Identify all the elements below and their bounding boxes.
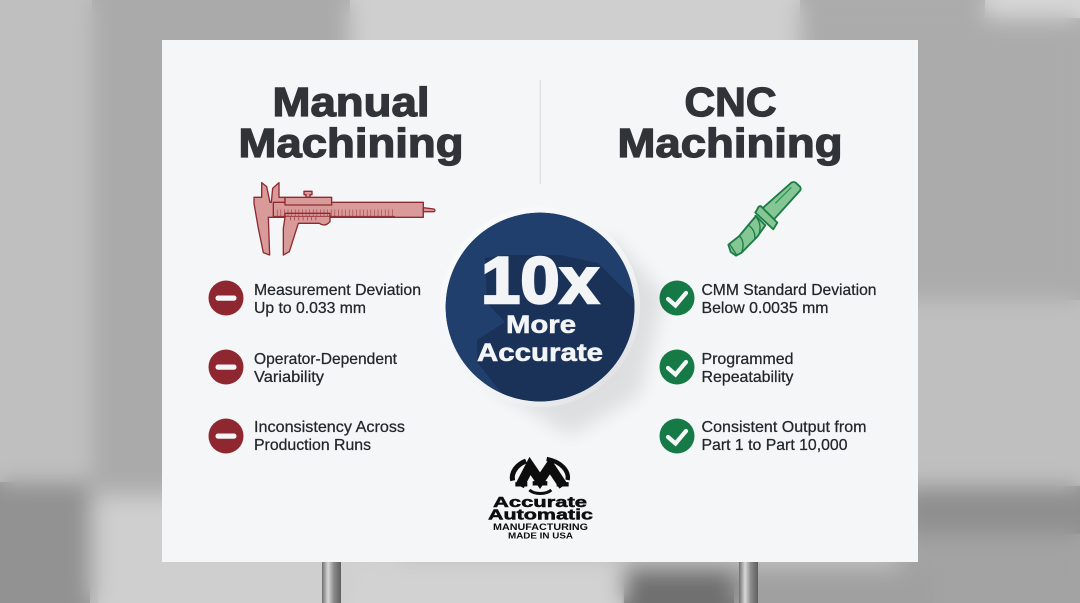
icon: check (660, 350, 694, 384)
text: operator variability: Variability (254, 369, 324, 386)
logo mark (512, 459, 569, 493)
badge: 10x more accurate (440, 207, 664, 436)
text: measurement deviation (254, 282, 421, 317)
signpost: left (322, 560, 341, 603)
centre divider (540, 80, 541, 184)
badge disc (446, 212, 640, 410)
logo wordmark: Accurate (493, 494, 587, 511)
icon: vernier caliper (254, 183, 435, 255)
text: consistent output (702, 419, 866, 454)
icon: check (660, 418, 694, 454)
logo wordmark: MADE IN USA (508, 530, 573, 540)
icon: green drill bit (728, 182, 801, 256)
heading: Manual Machining (238, 79, 464, 166)
heading: CNC Machining: Machining (618, 120, 842, 166)
logo wordmark: Automatic (488, 506, 593, 524)
heading: Manual Machining: Machining (238, 120, 464, 166)
text: inconsistency: Production Runs (254, 437, 371, 454)
list: manual machining drawbacks (208, 280, 421, 454)
heading: CNC Machining: CNC (684, 79, 776, 125)
signpost: right (739, 560, 758, 603)
logo wordmark: MANUFACTURING (493, 522, 588, 533)
icon: minus (208, 350, 244, 384)
badge label: Accurate (477, 339, 603, 367)
text: measurement deviation: Measurement Deviation (254, 282, 421, 299)
text: consistent output: Consistent Output from (702, 419, 866, 436)
text: operator variability (254, 351, 398, 386)
text: CMM standard deviation (702, 282, 876, 317)
badge label (477, 311, 603, 367)
heading: CNC Machining (618, 79, 842, 166)
sign panel (162, 40, 918, 562)
logo wordmark (488, 494, 593, 540)
text: inconsistency: Inconsistency Across (254, 419, 405, 436)
badge label: More (506, 311, 576, 339)
badge number: 10x (481, 243, 599, 317)
heading: Manual Machining: Manual (272, 79, 430, 125)
text: CMM standard deviation: Below 0.0035 mm (702, 300, 828, 317)
text: measurement deviation: Up to 0.033 mm (254, 300, 366, 317)
text: consistent output: Part 1 to Part 10,000 (702, 437, 848, 454)
text: inconsistency (254, 419, 405, 454)
badge cast shadow (490, 235, 664, 436)
list: CNC machining benefits (660, 280, 876, 454)
text: programmed repeatability: Repeatability (702, 369, 794, 386)
text: CMM standard deviation: CMM Standard Deviation (702, 282, 876, 299)
icon: check (660, 280, 694, 316)
icon: minus (208, 418, 244, 454)
logo: Accurate Automatic Manufacturing (488, 459, 593, 540)
icon: minus (208, 280, 244, 316)
text: programmed repeatability: Programmed (702, 351, 794, 368)
badge ring (440, 207, 640, 407)
text: programmed repeatability (702, 351, 794, 386)
text: operator variability: Operator-Dependent (254, 351, 398, 368)
